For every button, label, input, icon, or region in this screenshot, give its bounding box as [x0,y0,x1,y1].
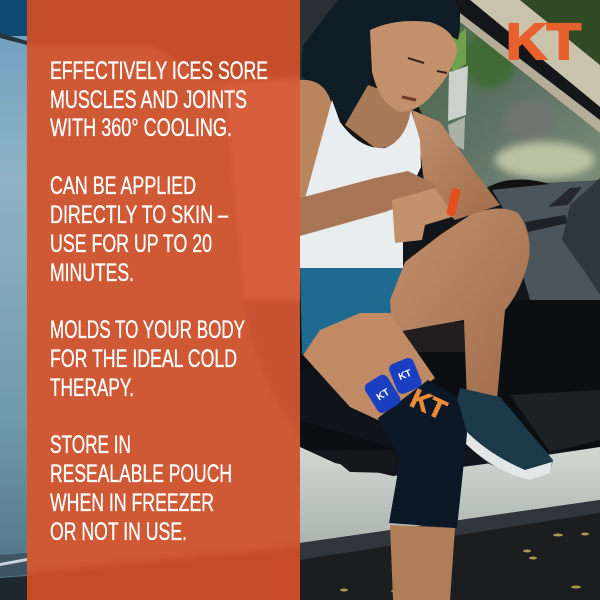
door frame [470,0,600,107]
shoe [455,388,553,480]
blue therapy patch left: KT [375,387,392,403]
orange watch band [446,187,461,217]
white tank top [300,100,421,268]
dashboard [490,180,600,300]
near forearm [300,171,436,236]
text: storage: STORE IN [50,431,131,459]
text: effectively ices: MUSCLES AND JOINTS [50,86,247,114]
photo background: car and ground [300,0,600,600]
blue therapy patch left [362,373,403,415]
raised leg [390,208,530,400]
text: storage: WHEN IN FREEZER [50,489,214,517]
trees outside [520,0,600,65]
far shoulder and upper arm [412,110,500,220]
fingers and hand [392,188,455,243]
dark car interior [300,0,345,90]
text: direct skin use: USE FOR UP TO 20 [50,230,212,258]
text: storage [50,431,232,546]
blue therapy patch right: KT [397,368,413,383]
text: direct skin use [50,172,228,287]
text: direct skin use: CAN BE APPLIED [50,172,196,200]
text: effectively ices [50,57,268,142]
lower thigh [303,313,435,420]
text: molds to body: MOLDS TO YOUR BODY [50,316,245,344]
neck and chest [345,85,412,148]
text: direct skin use: MINUTES. [50,259,134,287]
blue shorts [300,268,405,355]
black knee sleeve [378,380,467,528]
door opening and floor mat [300,300,600,450]
back arm skin [300,80,332,205]
text: storage: OR NOT IN USE. [50,518,187,546]
hair [301,0,460,125]
text: storage: RESEALABLE POUCH [50,460,232,488]
text: direct skin use: DIRECTLY TO SKIN – [50,201,228,229]
woman seated on car sill [300,0,553,600]
orange text panel [27,0,300,600]
window signs [448,66,468,121]
text: molds to body [50,316,245,402]
sleeve logo: KT [406,383,452,426]
text: effectively ices: EFFECTIVELY ICES SORE [50,57,268,85]
door sill [300,447,600,543]
logo: KT: KT [506,13,581,70]
face [370,21,457,112]
ground [300,513,600,600]
text: molds to body: THERAPY. [50,374,134,402]
left photo strip [0,0,27,600]
text: molds to body: FOR THE IDEAL COLD [50,345,237,373]
blue therapy patch right [387,356,423,396]
calf [390,525,455,600]
car window [415,22,600,195]
text: effectively ices: WITH 360° COOLING. [50,114,232,142]
